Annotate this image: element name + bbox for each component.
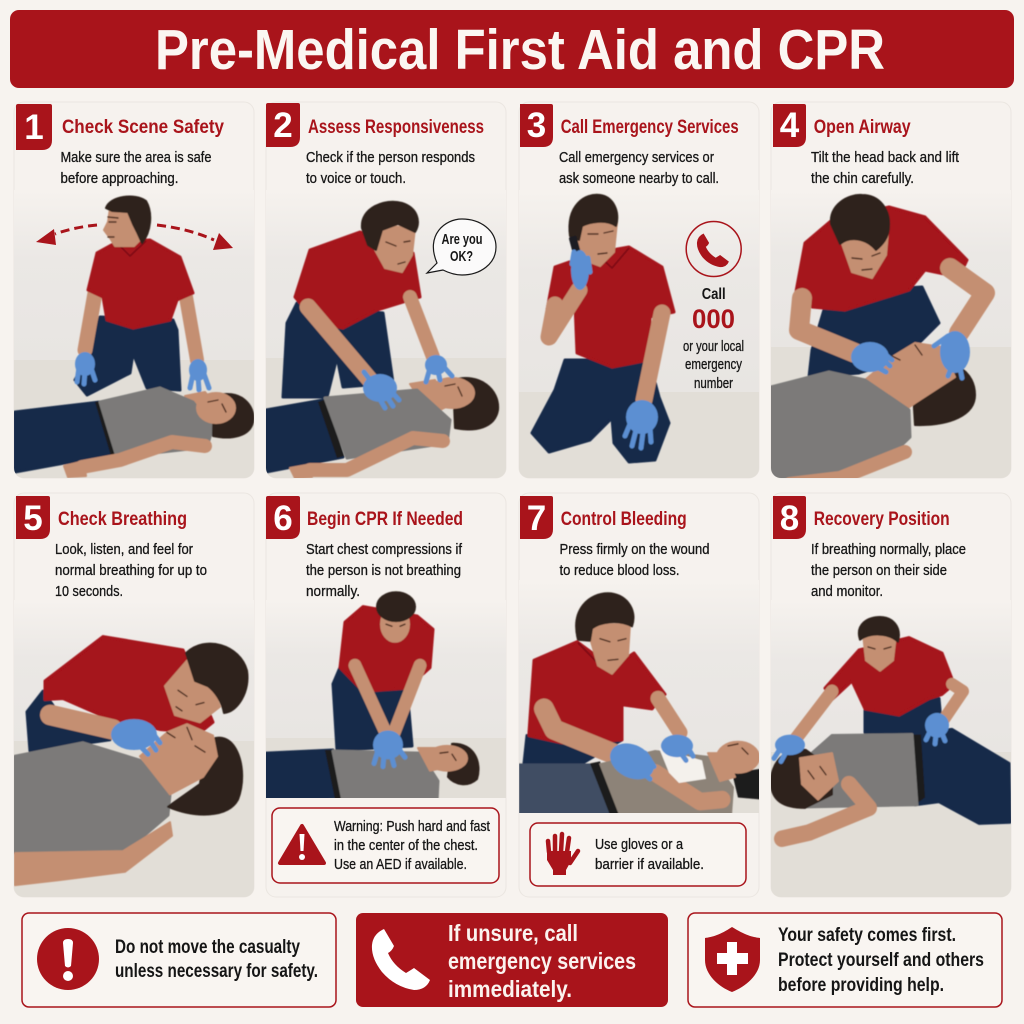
heading: Control Bleeding <box>561 508 687 530</box>
callout: your safety comes first: Your safety comes first. <box>778 925 956 946</box>
illustration: head tilt chin lift <box>771 190 1011 484</box>
badge: number 3: 3 <box>527 106 546 145</box>
icon: phone in circle <box>686 222 741 276</box>
badge: number 6: 6 <box>273 499 293 538</box>
description: ask someone nearby to call. <box>559 170 719 187</box>
callout: warning <box>272 808 499 883</box>
panel 2: assess responsiveness <box>266 102 506 478</box>
illustration: look listen feel <box>14 600 254 897</box>
panel 7: control bleeding <box>519 493 762 897</box>
description: Check if the person responds <box>306 149 475 166</box>
panel 8: recovery position <box>771 493 1011 897</box>
callout: call emergency services: immediately. <box>448 976 572 1002</box>
title banner: Pre-Medical First Aid and CPR <box>155 18 885 82</box>
badge: number 5: 5 <box>23 499 43 538</box>
callout: warning: in the center of the chest. <box>334 837 478 854</box>
description: before approaching. <box>60 170 178 187</box>
heading: Call Emergency Services <box>561 116 739 138</box>
description: the person is not breathing <box>306 562 461 579</box>
badge: number 1: 1 <box>24 108 44 147</box>
description: normally. <box>306 583 360 600</box>
badge: number 8: 8 <box>780 499 799 538</box>
badge: number 6 <box>266 496 300 539</box>
description: Call emergency services or <box>559 149 714 166</box>
callout: do not move: unless necessary for safety. <box>115 961 318 982</box>
icon: exclamation circle <box>37 928 99 990</box>
description: Start chest compressions if <box>306 541 463 558</box>
illustration: pressing on a wound <box>519 580 762 815</box>
description: Make sure the area is safe <box>60 149 212 166</box>
illustration: person on their side <box>771 600 1011 897</box>
heading: Begin CPR If Needed <box>307 508 463 530</box>
callout: call 000: number <box>694 375 733 392</box>
description: to voice or touch. <box>306 170 406 187</box>
callout: do not move: Do not move the casualty <box>115 937 300 958</box>
description <box>306 541 463 600</box>
panel 6: begin cpr <box>266 493 506 897</box>
badge: number 2: 2 <box>273 106 293 145</box>
description: and monitor. <box>811 583 883 600</box>
illustration: rescuer touching the person <box>266 190 506 478</box>
callout: call 000: emergency <box>685 356 742 373</box>
callout: call 000: or your local <box>683 338 744 355</box>
description <box>55 541 207 600</box>
panel 1: check scene safety <box>14 102 254 478</box>
icon: left scanning arrow <box>36 225 97 245</box>
description: If breathing normally, place <box>811 541 966 558</box>
badge: number 7: 7 <box>527 499 546 538</box>
speech bubble: are you ok <box>427 219 496 275</box>
illustration: rescuer on the phone <box>519 190 759 478</box>
heading: Recovery Position <box>814 508 950 530</box>
description <box>60 149 212 187</box>
badge: number 1 <box>16 104 52 150</box>
speech bubble: are you ok: OK? <box>450 249 473 265</box>
description: 10 seconds. <box>55 583 123 600</box>
heading: Assess Responsiveness <box>308 116 484 138</box>
callout: your safety comes first <box>688 913 1002 1007</box>
description <box>559 149 719 187</box>
callout: call 000 <box>683 286 744 392</box>
callout: use gloves: Use gloves or a <box>595 836 684 853</box>
title banner <box>10 10 1014 88</box>
description: the chin carefully. <box>811 170 914 187</box>
description: the person on their side <box>811 562 947 579</box>
description <box>306 149 475 187</box>
callout: warning: Warning: Push hard and fast <box>334 818 491 835</box>
heading: Check Breathing <box>58 508 187 530</box>
callout: warning: Use an AED if available. <box>334 856 467 873</box>
callout: use gloves: barrier if available. <box>595 856 704 873</box>
panel 3: call emergency services <box>519 102 759 478</box>
callout: use gloves <box>530 823 746 886</box>
illustration: rescuer scanning the scene <box>14 190 254 478</box>
badge: number 5 <box>16 496 50 539</box>
icon: white phone <box>372 929 430 990</box>
heading: Open Airway <box>814 116 911 138</box>
description: Look, listen, and feel for <box>55 541 193 558</box>
panel 4: open airway <box>771 102 1011 484</box>
badge: number 4 <box>773 104 806 147</box>
badge: number 4: 4 <box>780 106 800 145</box>
callout: your safety comes first: before providing help. <box>778 975 944 996</box>
callout: call emergency services: If unsure, call <box>448 920 578 946</box>
description: to reduce blood loss. <box>560 562 680 579</box>
heading: Check Scene Safety <box>62 116 224 138</box>
description <box>811 149 960 187</box>
callout: call emergency services: emergency services <box>448 948 636 974</box>
description: Press firmly on the wound <box>560 541 710 558</box>
icon: hand <box>547 834 578 875</box>
callout: do not move <box>22 913 336 1007</box>
badge: number 2 <box>266 103 300 147</box>
description <box>560 541 710 579</box>
description <box>811 541 966 600</box>
callout: call 000: 000 <box>692 304 735 334</box>
icon: shield with cross <box>705 927 760 992</box>
badge: number 3 <box>520 104 553 147</box>
icon: right scanning arrow <box>157 225 233 250</box>
badge: number 7 <box>520 496 553 539</box>
badge: number 8 <box>773 496 806 539</box>
callout: your safety comes first: Protect yourself and others <box>778 950 984 971</box>
description: normal breathing for up to <box>55 562 207 579</box>
icon: warning triangle <box>280 826 324 863</box>
panel 5: check breathing <box>14 493 254 897</box>
callout: call 000: Call <box>702 286 726 303</box>
description: Tilt the head back and lift <box>811 149 960 166</box>
speech bubble: are you ok: Are you <box>442 232 482 248</box>
illustration: chest compressions <box>266 592 506 802</box>
callout: call emergency services <box>356 913 668 1007</box>
